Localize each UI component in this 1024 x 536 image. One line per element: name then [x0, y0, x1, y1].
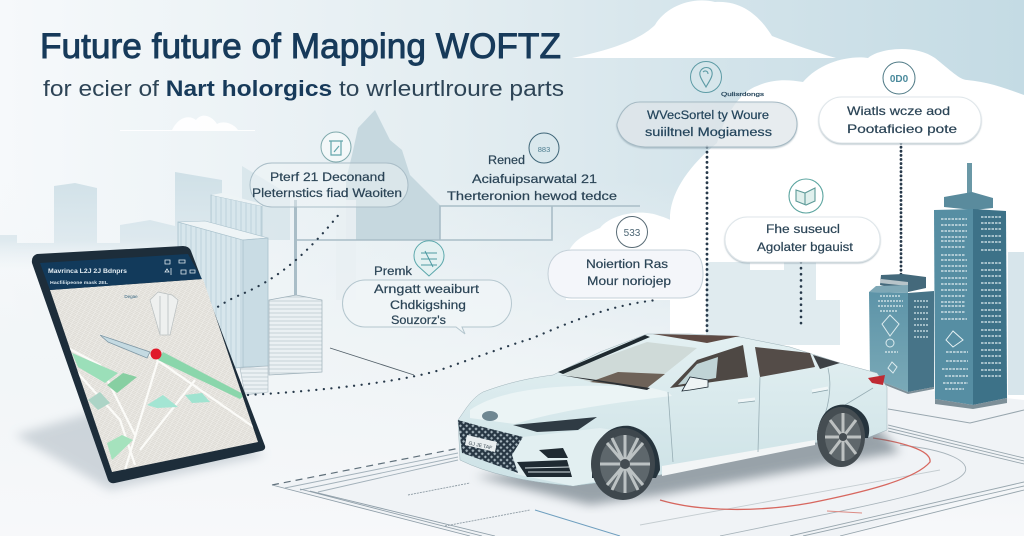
windshield — [560, 342, 697, 388]
front wheel — [591, 426, 660, 500]
callout: renewal text block — [447, 133, 617, 203]
car logo — [482, 411, 498, 421]
callout: demand panel — [250, 132, 408, 207]
rear wheel — [817, 405, 869, 467]
grille — [458, 420, 523, 473]
callout: renewal text block: Rened — [488, 155, 525, 167]
callout: renewal text block: Aciafuipsarwatal 21 — [472, 174, 597, 186]
air intake — [517, 448, 572, 477]
map screen — [50, 279, 258, 472]
map screen: Degae — [124, 294, 138, 299]
connector lines — [296, 206, 640, 300]
callout: mapping progress: suiiltnel Mogiamess — [645, 127, 772, 139]
callout: charging sources: Premk — [374, 266, 412, 278]
callout: vehicle portfolio — [819, 62, 981, 143]
number plate — [465, 435, 497, 452]
icon: badge 883 — [529, 133, 559, 163]
headlight — [513, 417, 597, 432]
left striped buildings — [178, 193, 322, 395]
icon: badge 0D0 — [883, 62, 915, 94]
dotted connectors — [157, 143, 901, 395]
car body — [458, 334, 887, 486]
short tower — [869, 274, 934, 394]
ground plane with route lines — [272, 348, 1024, 536]
hood highlight — [470, 386, 672, 424]
icon: badge 883: 883 — [538, 145, 550, 154]
icon: light bulb — [690, 62, 722, 92]
icon: badge 533: 533 — [624, 228, 641, 239]
callout: agolater: Fhe suseucl — [766, 224, 840, 236]
side windows — [670, 345, 840, 388]
background: pale city skyline — [0, 110, 1024, 395]
callout: demand panel: Pterf 21 Deconand — [270, 172, 385, 184]
icon: map pin — [414, 241, 444, 276]
door seams and handles — [668, 368, 873, 462]
number plate: GJ JE TAF — [468, 441, 493, 451]
tablet header: Mavrinca L2J 2J Bdnprs — [48, 268, 128, 275]
callout: charging sources: Arngatt weaiburt — [374, 284, 480, 296]
side mirror — [682, 377, 708, 391]
callout: notification: Noiertion Ras — [586, 259, 668, 271]
map location marker — [150, 348, 162, 360]
callout: charging sources: Souzorz's — [391, 315, 446, 327]
callout: agolater: Agolater bgauist — [757, 242, 854, 254]
callout: vehicle portfolio: Wiatls wcze aod — [847, 104, 950, 118]
sill — [662, 440, 815, 476]
callout: agolater — [725, 179, 880, 262]
icon: badge 0D0: 0D0 — [890, 74, 909, 85]
callout: charging sources: Chdkigshing — [390, 300, 466, 312]
callout: renewal text block: Therteronion hewod tedce — [447, 191, 617, 203]
icon: open map — [789, 179, 823, 213]
callout: vehicle portfolio: Pootaficieo pote — [847, 122, 957, 136]
front bumper — [512, 428, 655, 486]
callout: demand panel: Pleternstics fiad Waoiten — [252, 188, 402, 200]
callout: mapping progress: WVecSortel ty Woure — [647, 110, 769, 122]
callout: mapping progress — [617, 62, 797, 147]
car — [458, 334, 887, 500]
car roof — [653, 334, 740, 343]
tablet with map — [32, 246, 270, 483]
icon: map sign — [321, 132, 351, 162]
icon: badge 533 — [616, 216, 648, 248]
car shadow — [475, 420, 900, 505]
title: Future future of Mapping WOFTZ — [40, 27, 561, 66]
callout: notification — [548, 216, 703, 298]
taillight — [868, 375, 885, 385]
tablet header: Hacfiliipeone mask 2EL — [50, 280, 108, 285]
background: clouds — [120, 0, 1024, 430]
tall tower — [934, 163, 1007, 409]
tablet header — [40, 254, 202, 290]
callout: charging sources — [343, 241, 511, 334]
subtitle: for ecier of Nart holorgics to wrleurtlroure parts — [43, 76, 564, 101]
callout: mapping progress: Qulisrdongs — [721, 92, 764, 98]
callout: notification: Mour noriojep — [587, 276, 671, 288]
tablet shadow — [15, 395, 265, 490]
